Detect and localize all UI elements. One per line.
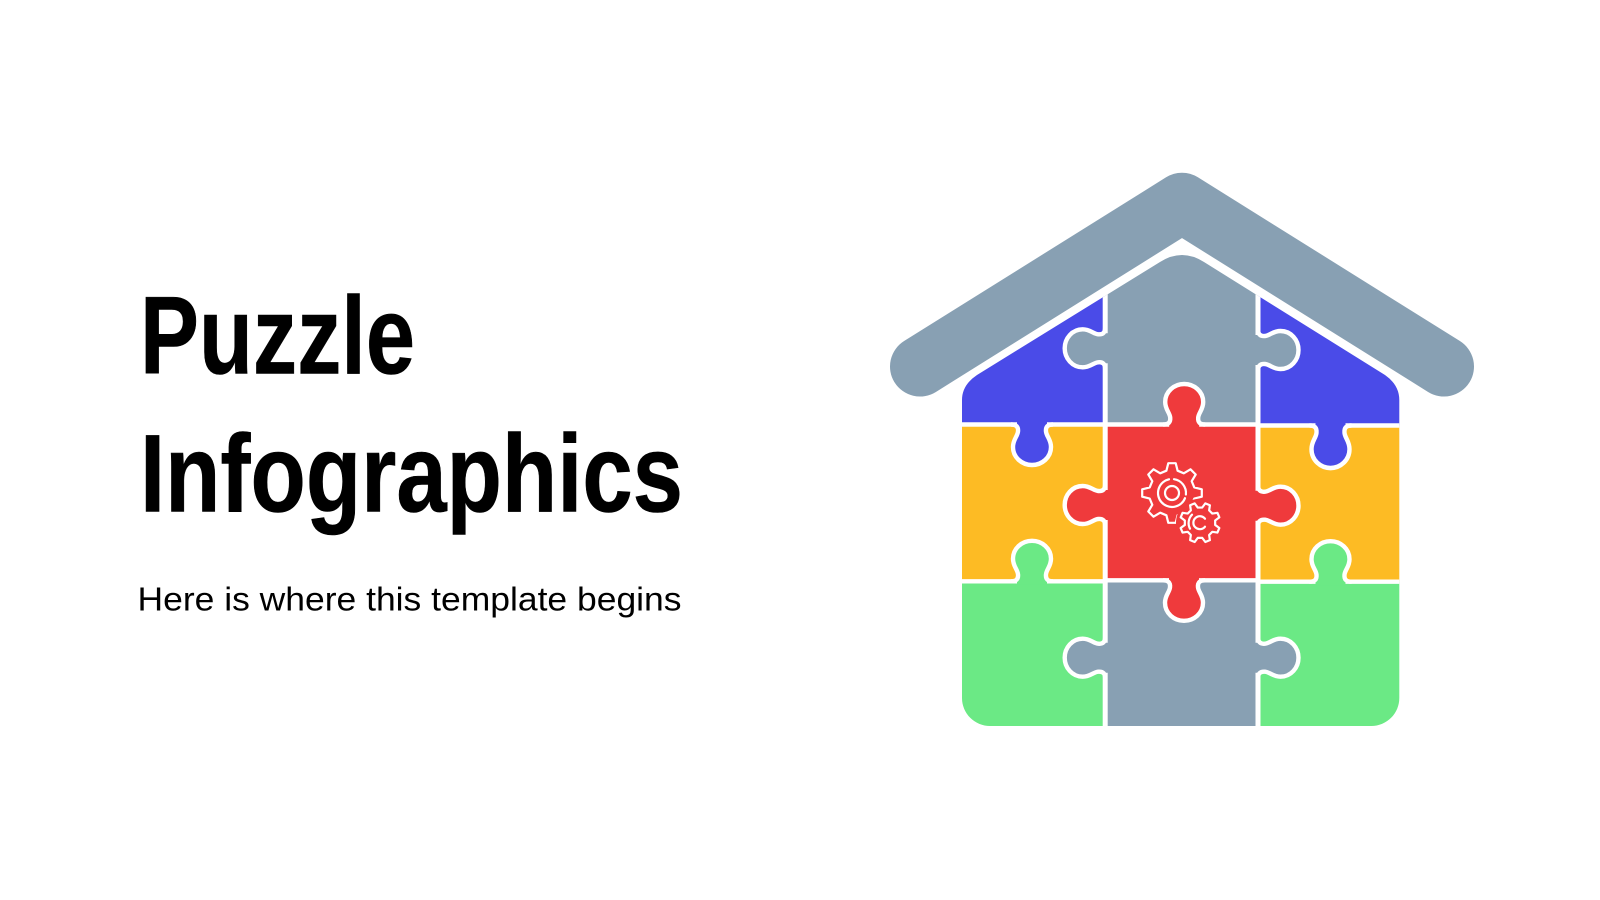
knob: slate into top left blue (1065, 327, 1109, 369)
piece: top centre slate (1105, 240, 1258, 424)
piece: top left blue (962, 296, 1106, 422)
knob: blue into right yellow (1310, 422, 1352, 468)
piece: bottom right green (1260, 582, 1400, 726)
knob: green into left yellow (1011, 541, 1053, 585)
knob: slate into top right blue (1254, 329, 1298, 371)
knob: slate into bottom left green (1065, 637, 1109, 679)
house puzzle illustration (920, 203, 1444, 735)
icon: gears (1142, 463, 1226, 549)
knob: red into right yellow (1254, 485, 1298, 527)
knob: red into left yellow (1065, 484, 1109, 526)
title: Puzzle (140, 274, 415, 398)
puzzle house body (950, 240, 1410, 735)
roof (920, 203, 1444, 366)
small gear (1174, 497, 1226, 549)
subtitle: Here is where this template begins (138, 580, 682, 618)
knob: red into top slate (1163, 384, 1205, 428)
title (140, 274, 683, 536)
knob: green into right yellow (1310, 541, 1352, 585)
piece: top right blue (1258, 296, 1400, 426)
large gear (1142, 463, 1202, 523)
knob: slate into bottom right green (1254, 637, 1298, 679)
piece: middle right yellow (1258, 426, 1410, 582)
piece: middle centre red (1105, 424, 1258, 580)
knob: blue into left yellow (1011, 421, 1053, 465)
title: Infographics (140, 412, 683, 536)
piece: bottom centre slate (1105, 580, 1258, 731)
piece: middle left yellow (962, 426, 1103, 580)
knob: red into bottom slate (1163, 577, 1205, 621)
piece: bottom left green (962, 584, 1103, 726)
